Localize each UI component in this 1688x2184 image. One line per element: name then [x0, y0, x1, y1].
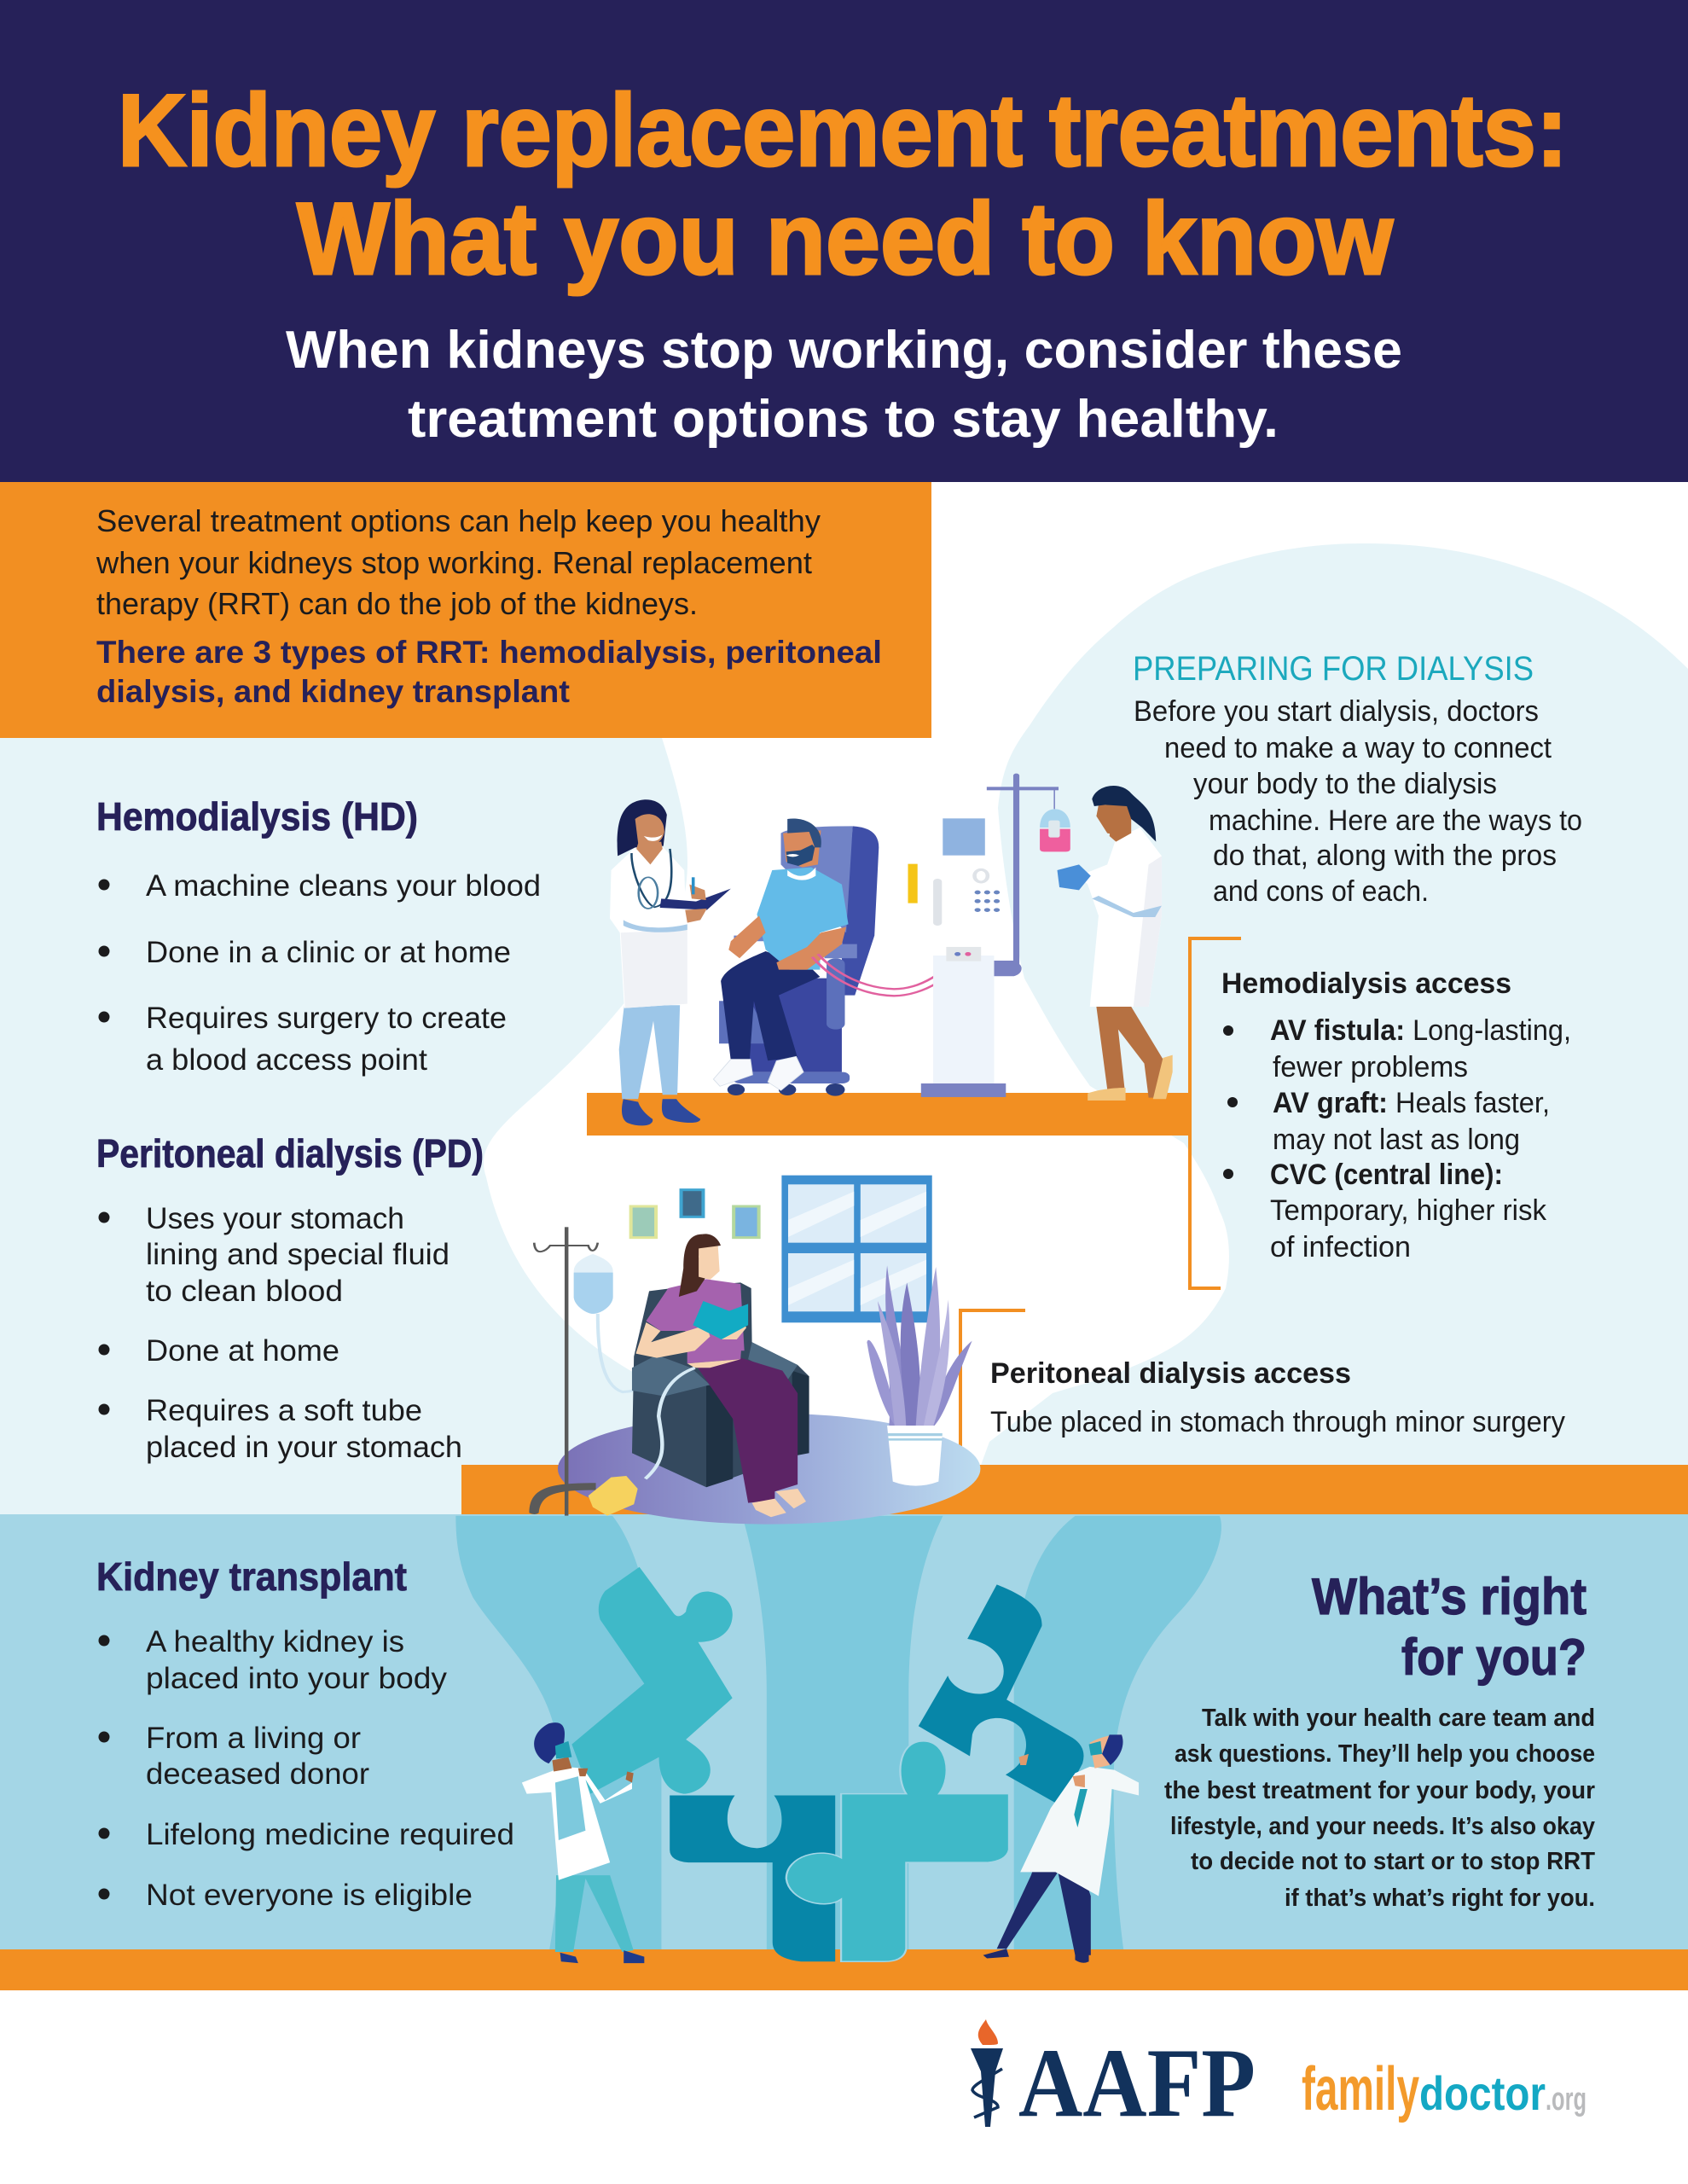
woman reading [635, 1234, 806, 1517]
floor: peritoneal platform [461, 1465, 1688, 1514]
text: preparing for dialysis: do that, along with the pros [1213, 839, 1557, 872]
intro text: when your kidneys stop working. Renal replacement [96, 545, 812, 580]
doctor: right [983, 1734, 1139, 1963]
list: hemodialysis access options: fewer problems [1273, 1051, 1468, 1083]
intro text [96, 503, 821, 621]
list: kidney transplant facts: From a living or [146, 1722, 361, 1755]
heading: peritoneal dialysis: Peritoneal dialysis (PD) [96, 1131, 484, 1176]
plant [867, 1265, 972, 1486]
title [118, 73, 1568, 296]
list: peritoneal dialysis facts: placed in your stomach [146, 1431, 462, 1464]
list: kidney transplant facts: Not everyone is eligible [146, 1879, 473, 1912]
title: What you need to know [297, 182, 1394, 296]
armchair [632, 1282, 809, 1487]
list: peritoneal dialysis facts: Uses your stomach [146, 1202, 404, 1235]
list: kidney transplant facts: A healthy kidney is [146, 1625, 404, 1658]
list: hemodialysis access options: CVC (central line): [1270, 1159, 1503, 1191]
text: what's right for you: Talk with your health care team and [1202, 1705, 1595, 1732]
list: kidney transplant facts [99, 1625, 514, 1912]
list: hemodialysis access options [1223, 1014, 1571, 1263]
drain tube and bag [589, 1368, 695, 1516]
dialysis chair [719, 826, 879, 1096]
list: hemodialysis access options: AV fistula: Long-lasting, [1270, 1014, 1571, 1047]
list: kidney transplant facts: placed into your body [146, 1662, 448, 1695]
blood tubes [812, 953, 969, 996]
list: peritoneal dialysis facts: to clean blood [146, 1275, 343, 1308]
heading: hemodialysis access: Hemodialysis access [1221, 967, 1511, 1000]
logo: familydoctor.org: family [1302, 2055, 1419, 2123]
subtitle: When kidneys stop working, consider these [286, 321, 1402, 380]
doctor: left [522, 1722, 644, 1963]
list: hemodialysis access options: Temporary, higher risk [1270, 1194, 1547, 1227]
nurse [1057, 786, 1173, 1101]
intro text: Several treatment options can help keep you healthy [96, 503, 821, 538]
text: preparing for dialysis: machine. Here are the ways to [1209, 804, 1582, 837]
puzzle piece: bottom right [786, 1741, 1009, 1961]
illustration: puzzle and doctors [522, 1567, 1139, 1963]
text: preparing for dialysis: your body to the dialysis [1193, 768, 1497, 800]
text: what's right for you: if that’s what’s right for you. [1285, 1885, 1595, 1912]
list: hemodialysis access options: AV graft: Heals faster, [1273, 1087, 1550, 1119]
illustration: hemodialysis scene [610, 774, 1173, 1125]
logo icon: torch [971, 2019, 1003, 2127]
list: hemodialysis facts: a blood access point [146, 1043, 427, 1077]
heading: hemodialysis: Hemodialysis (HD) [96, 794, 418, 839]
IV pole and bag [987, 774, 1070, 976]
callout bracket: hemodialysis access [1190, 938, 1241, 1288]
heading: kidney transplant: Kidney transplant [96, 1554, 407, 1599]
list: hemodialysis access options: of infection [1270, 1231, 1411, 1263]
heading: what's right for you [1312, 1568, 1586, 1686]
background: light blue left panel [0, 738, 687, 1514]
list: hemodialysis facts: Done in a clinic or at home [146, 936, 511, 969]
list: peritoneal dialysis facts: Done at home [146, 1334, 339, 1368]
callout: peritoneal dialysis access: Peritoneal dialysis access [990, 1357, 1351, 1390]
text: what's right for you: lifestyle, and your needs. It’s also okay [1170, 1813, 1595, 1840]
text: preparing for dialysis: Before you start dialysis, doctors [1134, 695, 1539, 728]
list: hemodialysis facts: A machine cleans your blood [146, 869, 541, 903]
subtitle: treatment options to stay healthy. [408, 390, 1279, 449]
text: what's right for you: to decide not to start or to stop RRT [1191, 1848, 1595, 1875]
dialysis machine [908, 818, 1006, 1097]
lower band background [0, 1514, 1688, 1954]
doctor with clipboard [610, 799, 731, 1125]
rug [558, 1414, 980, 1525]
logo: familydoctor.org [1302, 2055, 1586, 2123]
subtitle [286, 321, 1402, 449]
intro text: therapy (RRT) can do the job of the kidneys. [96, 586, 698, 621]
text: what's right for you [1164, 1705, 1595, 1912]
puzzle piece: top left [571, 1567, 733, 1794]
text: preparing for dialysis [1134, 695, 1582, 908]
puzzle piece: bottom left [670, 1796, 835, 1961]
header band [0, 0, 1688, 482]
list: kidney transplant facts: deceased donor [146, 1757, 369, 1791]
list: hemodialysis access options: may not last as long [1273, 1124, 1520, 1156]
IV stand [529, 1227, 695, 1516]
intro bold statement: There are 3 types of RRT: hemodialysis, peritoneal [96, 635, 882, 670]
patient [713, 818, 849, 1090]
picture frames [631, 1190, 759, 1238]
heading: preparing for dialysis: PREPARING FOR DIALYSIS [1133, 650, 1534, 688]
text: preparing for dialysis: and cons of each. [1213, 875, 1429, 908]
intro bold statement: dialysis, and kidney transplant [96, 674, 570, 709]
list: peritoneal dialysis facts [99, 1202, 462, 1464]
list: peritoneal dialysis facts: lining and special fluid [146, 1238, 450, 1271]
heading: what's right for you: What’s right [1312, 1568, 1586, 1625]
logo: familydoctor.org: .org [1546, 2082, 1586, 2117]
list: kidney transplant facts: Lifelong medicine required [146, 1818, 514, 1851]
text: what's right for you: ask questions. They’ll help you choose [1175, 1740, 1595, 1768]
illustration: peritoneal dialysis scene [529, 1176, 980, 1525]
heading: what's right for you: for you? [1401, 1629, 1586, 1686]
list: hemodialysis facts: Requires surgery to create [146, 1002, 507, 1035]
callout: peritoneal dialysis access: Tube placed in stomach through minor surgery [990, 1406, 1565, 1438]
intro bold statement [96, 635, 882, 709]
text: what's right for you: the best treatment for your body, your [1164, 1777, 1595, 1804]
puzzle piece: top right [919, 1584, 1084, 1806]
list: hemodialysis facts [99, 869, 541, 1077]
window [781, 1176, 932, 1322]
floor: hemodialysis platform [587, 1093, 1191, 1136]
title: Kidney replacement treatments: [118, 73, 1568, 188]
list: peritoneal dialysis facts: Requires a soft tube [146, 1394, 422, 1427]
callout: peritoneal dialysis access [960, 1310, 1565, 1446]
logo: familydoctor.org: doctor [1419, 2066, 1546, 2120]
bottom orange bar [0, 1949, 1688, 1990]
background: light blue right blob [980, 543, 1688, 1467]
panel: intro orange box [0, 482, 931, 738]
logo: AAFP: AAFP [1018, 2029, 1256, 2138]
text: preparing for dialysis: need to make a way to connect [1164, 732, 1552, 764]
